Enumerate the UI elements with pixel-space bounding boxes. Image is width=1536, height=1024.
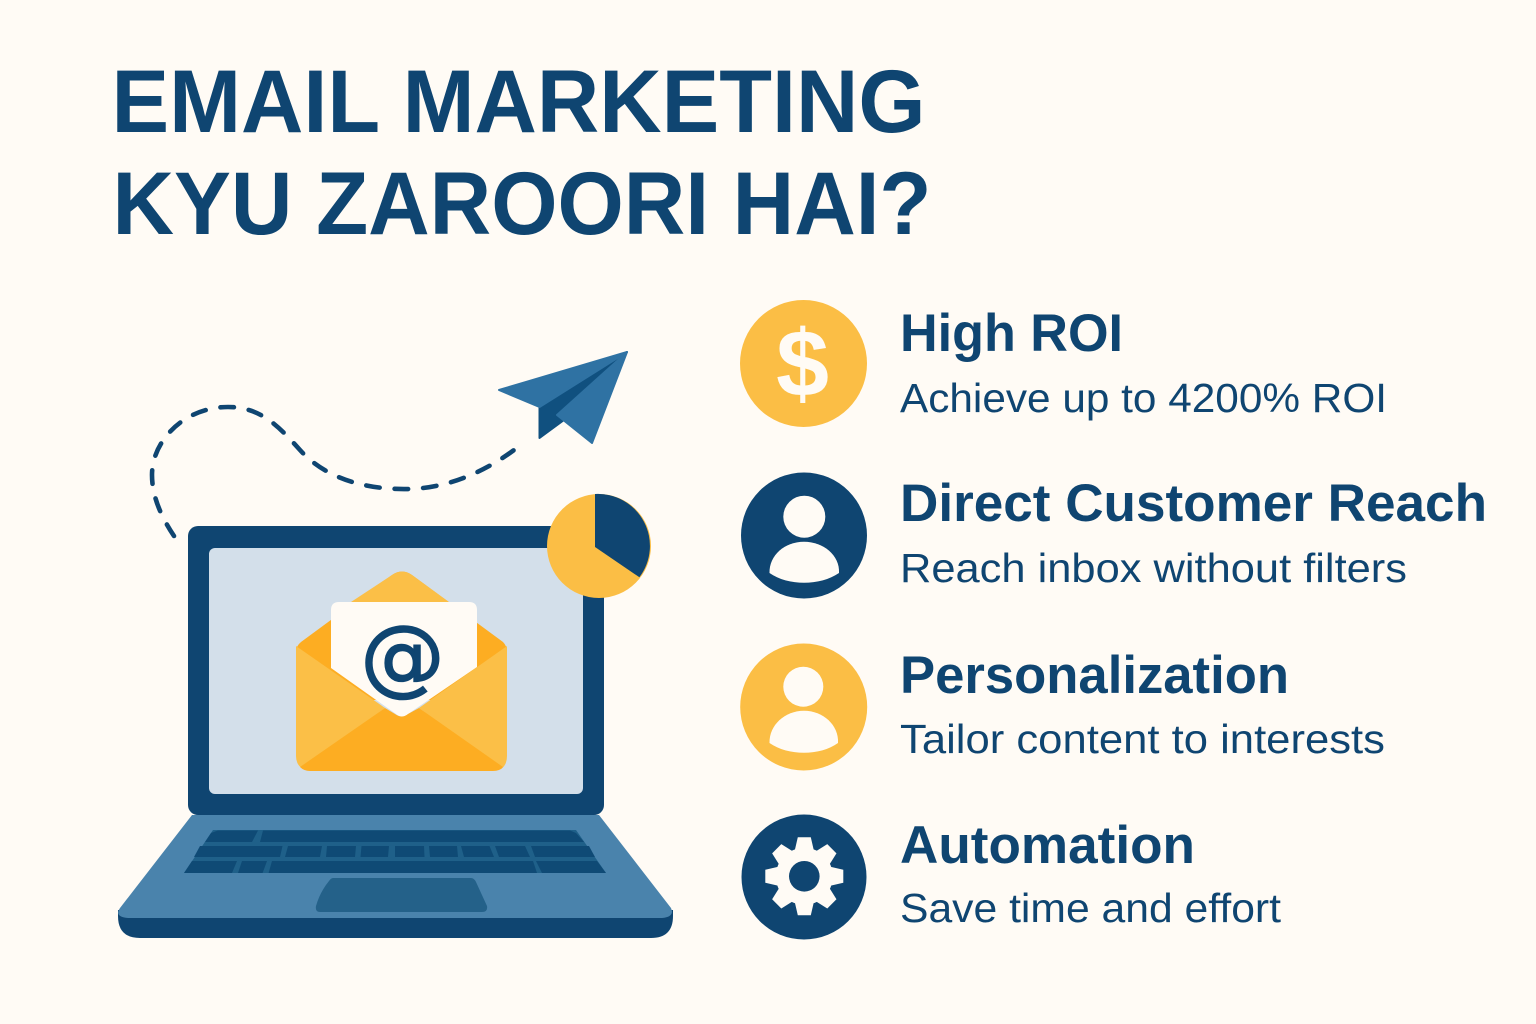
heading: Automation — [900, 816, 1195, 875]
title: KYU ZAROORI HAI? — [112, 153, 932, 253]
laptop base — [118, 815, 673, 938]
description: Reach inbox without filters — [900, 545, 1407, 591]
icon: person navy — [741, 472, 867, 598]
icon: paper plane — [499, 352, 627, 443]
icon: dollar: $ — [776, 311, 829, 417]
icon: dollar — [740, 300, 867, 427]
description: Tailor content to interests — [900, 716, 1385, 762]
benefit: high ROI — [740, 300, 1387, 427]
paper with at sign: @ — [360, 607, 444, 705]
paper with at sign — [331, 602, 477, 716]
keyboard — [184, 830, 606, 873]
title — [112, 51, 932, 253]
benefit: direct customer reach — [741, 472, 1487, 598]
touchpad — [316, 878, 487, 912]
icon: envelope — [296, 572, 507, 771]
icon: person yellow — [740, 644, 867, 770]
laptop screen — [188, 526, 604, 815]
benefit: personalization — [740, 644, 1385, 770]
dashed flight path — [152, 407, 523, 536]
heading: High ROI — [900, 304, 1123, 363]
description: Save time and effort — [900, 885, 1282, 931]
icon: gear — [742, 814, 866, 940]
pie chart — [547, 494, 651, 598]
description: Achieve up to 4200% ROI — [900, 375, 1387, 421]
heading: Direct Customer Reach — [900, 474, 1487, 533]
benefit: automation — [742, 814, 1282, 940]
title: EMAIL MARKETING — [112, 51, 926, 151]
heading: Personalization — [900, 646, 1289, 705]
illustration: laptop with email — [118, 352, 673, 938]
